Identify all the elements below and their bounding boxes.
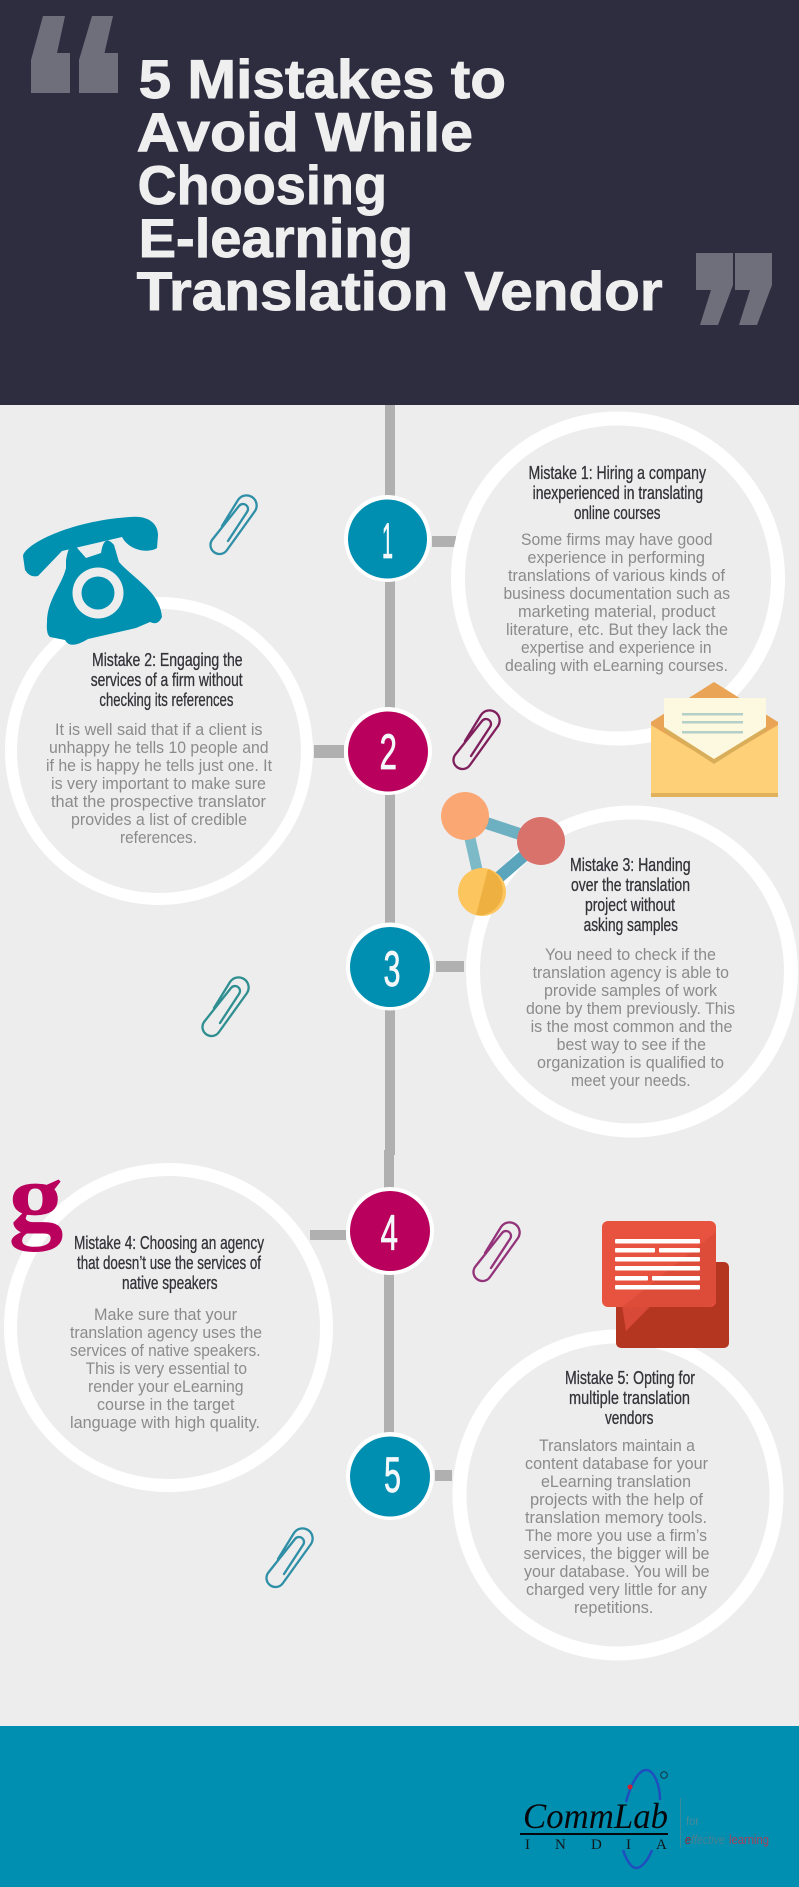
body text: mistake 2: unhappy he tells 10 people and <box>49 738 269 757</box>
heading: mistake 2: checking its references <box>99 689 233 710</box>
body text: mistake 3: You need to check if the <box>545 945 716 964</box>
tagline: for <box>686 1814 699 1828</box>
body text: mistake 4: services of native speakers. <box>70 1341 260 1360</box>
logo: CommLab India: I <box>626 1837 631 1853</box>
body text: mistake 4: render your eLearning <box>88 1377 244 1396</box>
logo: CommLab India: CommLab <box>523 1796 668 1836</box>
body text: mistake 5: charged very little for any <box>526 1580 707 1599</box>
body text: mistake 2 <box>46 720 272 847</box>
heading: mistake 3: over the translation <box>571 874 690 895</box>
title: Translation Vendor <box>137 260 663 322</box>
heading: mistake 4: Mistake 4: Choosing an agency <box>74 1232 265 1253</box>
number badge 3: 3 <box>384 941 400 997</box>
title: 5 Mistakes to <box>139 48 506 110</box>
number badge 2: 2 <box>380 724 397 780</box>
body text: mistake 2: references. <box>120 828 197 847</box>
heading: mistake 5 <box>565 1367 695 1428</box>
body text: mistake 1: literature, etc. But they lack the <box>506 620 728 639</box>
number badge 3 <box>346 922 434 1010</box>
body text: mistake 2: It is well said that if a client is <box>55 720 262 739</box>
heading: mistake 2: Mistake 2: Engaging the <box>92 649 243 670</box>
tagline: effective <box>685 1832 725 1847</box>
icon: chat bubbles <box>602 1221 729 1348</box>
body text: mistake 1 <box>504 530 730 675</box>
connector 4 <box>310 1230 346 1240</box>
body text: mistake 5: content database for your <box>525 1454 708 1473</box>
icon: paper clip 1 <box>210 495 257 554</box>
body text: mistake 2: that the prospective translator <box>51 792 266 811</box>
body text: mistake 1: dealing with eLearning courses. <box>505 656 728 675</box>
icon: paper clip 3 <box>202 977 249 1036</box>
icon: paper clip 2 <box>453 710 500 769</box>
body text: mistake 5: your database. You will be <box>524 1562 710 1581</box>
heading: mistake 4: native speakers <box>122 1272 218 1293</box>
body text: mistake 4: course in the target <box>97 1395 235 1414</box>
heading: mistake 3: Mistake 3: Handing <box>570 854 691 875</box>
panel: mistake 1 <box>458 418 778 738</box>
number badge 1: 1 <box>382 513 393 569</box>
logo: CommLab India: A <box>656 1837 667 1853</box>
body text: mistake 4: translation agency uses the <box>70 1323 262 1342</box>
body text: mistake 1: Some firms may have good <box>521 530 712 549</box>
icon: paper clip 5 <box>266 1528 313 1587</box>
connector 2 <box>314 745 344 758</box>
heading: mistake 5: Mistake 5: Opting for <box>565 1367 695 1388</box>
body text: mistake 4 <box>70 1305 262 1432</box>
heading: mistake 3: asking samples <box>584 914 678 935</box>
logo: CommLab India: I <box>525 1837 530 1853</box>
body text: mistake 5: Translators maintain a <box>539 1436 695 1455</box>
panel: mistake 2 <box>11 603 307 899</box>
body text: mistake 2: if he is happy he tells just one. It <box>46 756 272 775</box>
title: Avoid While <box>137 101 473 163</box>
heading: mistake 5: vendors <box>605 1407 653 1428</box>
body text: mistake 5: eLearning translation <box>541 1472 691 1491</box>
number badge 2 <box>344 707 432 795</box>
panel: mistake 5 <box>460 1336 776 1654</box>
body text: mistake 3: done by them previously. This <box>526 999 735 1018</box>
body text: mistake 1: experience in performing <box>528 548 705 567</box>
body text: mistake 1: marketing material, product <box>518 602 716 621</box>
icon: closing quote mark <box>696 253 772 325</box>
logo: CommLab India: N <box>555 1837 566 1853</box>
heading: mistake 4 <box>74 1232 265 1293</box>
title <box>137 48 663 322</box>
body text: mistake 2: provides a list of credible <box>71 810 247 829</box>
heading: mistake 1: online courses <box>574 502 660 523</box>
body text: mistake 3: meet your needs. <box>571 1071 691 1090</box>
body text: mistake 3: is the most common and the <box>531 1017 732 1036</box>
body text: mistake 5: translation memory tools. <box>525 1508 707 1527</box>
body text: mistake 2: is very important to make sure <box>51 774 266 793</box>
panel: mistake 4 <box>10 1170 326 1486</box>
number badge 5 <box>346 1432 434 1520</box>
body text: mistake 4: language with high quality. <box>70 1413 260 1432</box>
body text: mistake 3 <box>526 945 735 1090</box>
body text: mistake 3: translation agency is able to <box>533 963 729 982</box>
header banner <box>0 0 799 405</box>
body text: mistake 1: business documentation such as <box>504 584 730 603</box>
body text: mistake 5: services, the bigger will be <box>524 1544 710 1563</box>
timeline spine <box>384 405 395 1440</box>
heading: mistake 1: Mistake 1: Hiring a company <box>528 462 707 483</box>
connector 1 <box>432 536 456 547</box>
body text: mistake 3: best way to see if the <box>557 1035 706 1054</box>
panel: mistake 3 <box>473 812 791 1130</box>
body text: mistake 1: translations of various kinds of <box>508 566 725 585</box>
icon: telephone <box>23 517 162 645</box>
icon: network nodes <box>441 792 565 916</box>
heading: mistake 4: that doesn’t use the services of <box>77 1252 262 1273</box>
number badge 1 <box>344 495 431 582</box>
heading: mistake 2: services of a firm without <box>91 669 243 690</box>
body text: mistake 3: provide samples of work <box>544 981 717 1000</box>
heading: mistake 3 <box>570 854 691 935</box>
number badge 4: 4 <box>380 1205 398 1261</box>
footer band <box>0 1726 799 1887</box>
connector 5 <box>435 1470 452 1481</box>
body text: mistake 4: This is very essential to <box>86 1359 247 1378</box>
title: Choosing <box>138 154 387 216</box>
body text: mistake 3: organization is qualified to <box>537 1053 724 1072</box>
body text: mistake 5: The more you use a firm’s <box>525 1526 707 1545</box>
connector 3 <box>436 961 464 972</box>
number badge 4 <box>346 1187 434 1275</box>
body text: mistake 4: Make sure that your <box>94 1305 237 1324</box>
number badge 5: 5 <box>384 1447 401 1503</box>
body text: mistake 5 <box>524 1436 710 1617</box>
icon: opening quote mark <box>31 16 118 93</box>
body text: mistake 5: repetitions. <box>574 1598 653 1617</box>
tagline <box>680 1798 769 1848</box>
heading: mistake 5: multiple translation <box>569 1387 690 1408</box>
tagline: learning <box>729 1832 769 1847</box>
heading: mistake 3: project without <box>585 894 675 915</box>
icon: paper clip 4 <box>473 1222 520 1281</box>
title: E-learning <box>139 207 413 269</box>
logo: CommLab India: D <box>591 1837 602 1853</box>
body text: mistake 1: expertise and experience in <box>521 638 712 657</box>
body text: mistake 5: projects with the help of <box>530 1490 703 1509</box>
heading: mistake 1 <box>528 462 707 523</box>
icon: letter g: g <box>8 1143 64 1252</box>
heading: mistake 1: inexperienced in translating <box>533 482 703 503</box>
icon: envelope <box>651 682 778 797</box>
logo: CommLab India <box>520 1770 668 1868</box>
heading: mistake 2 <box>91 649 243 710</box>
